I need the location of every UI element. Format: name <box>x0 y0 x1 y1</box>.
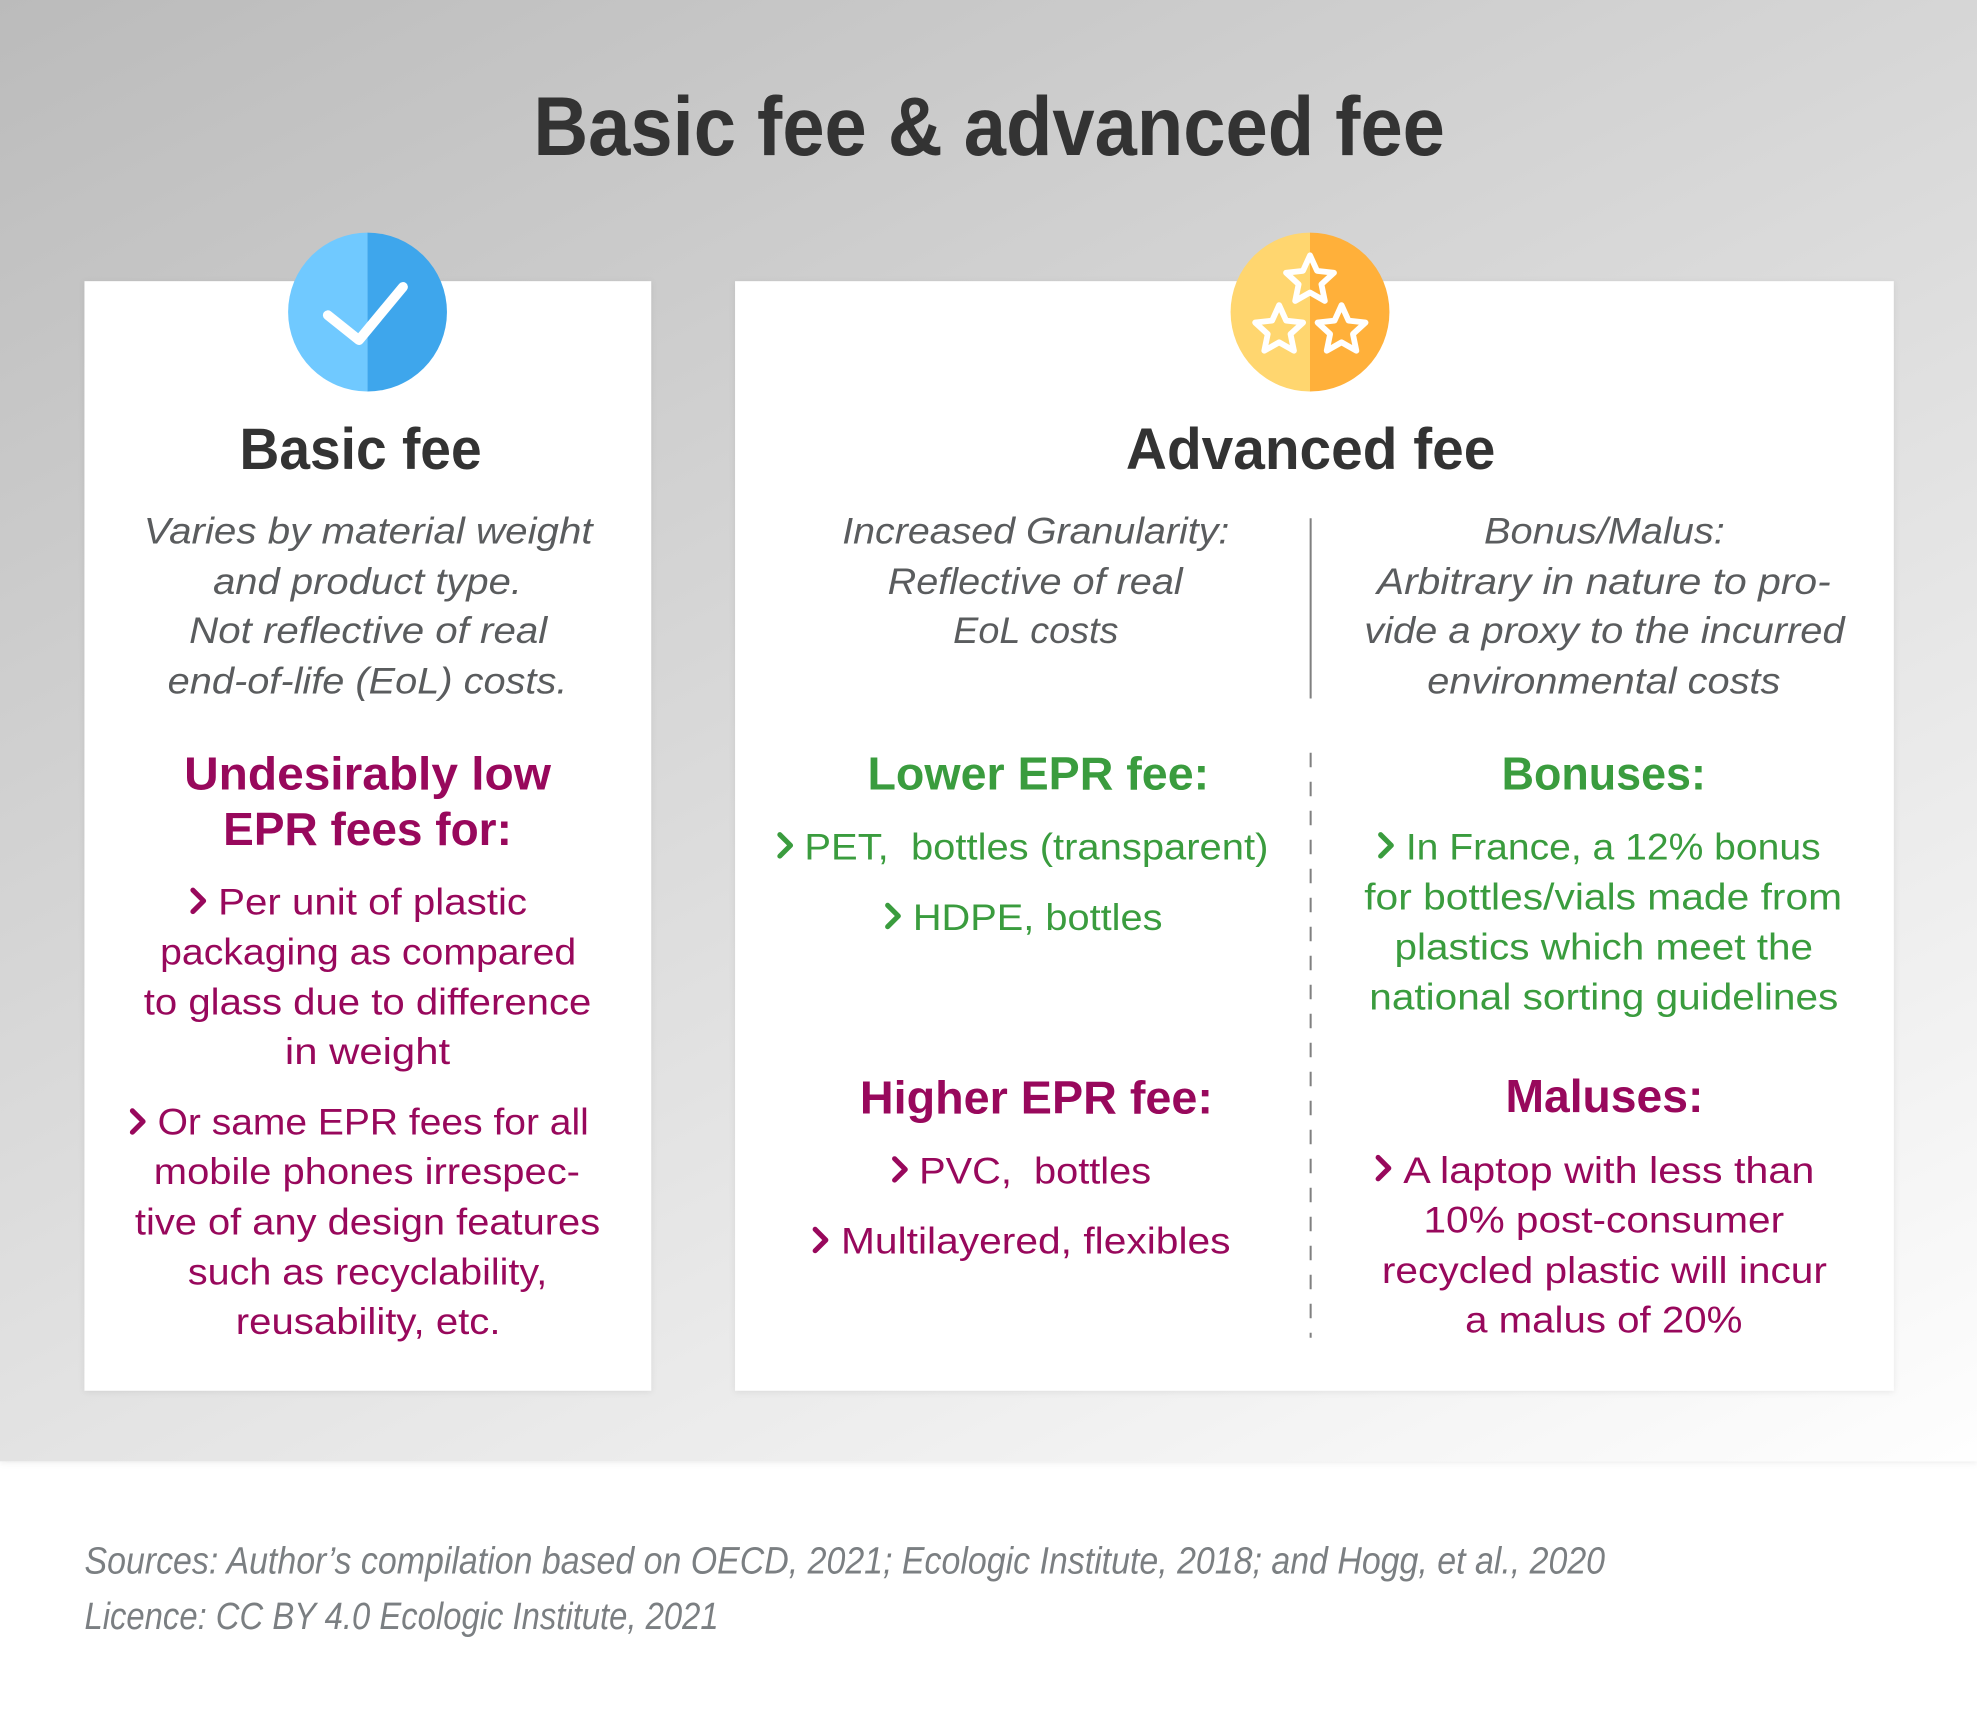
heading: basic fee: Basic fee <box>240 418 482 482</box>
subheading: undesirably low EPR fees <box>184 747 552 855</box>
text: increased granularity: Increased Granularity: <box>842 509 1229 551</box>
text: bonus/malus <box>1364 509 1846 701</box>
list item: France bonus: In France, a 12% bonus <box>1406 826 1821 868</box>
text: increased granularity <box>842 509 1229 651</box>
list item: laptop malus: 10% post-consumer <box>1423 1199 1784 1241</box>
subheading: undesirably low EPR fees: EPR fees for: <box>223 803 512 855</box>
list item: mobile phones: mobile phones irrespec- <box>154 1150 580 1192</box>
text: basic fee description <box>144 509 594 701</box>
text: basic fee description: Not reflective of real <box>189 609 549 651</box>
subheading: maluses: Maluses: <box>1505 1070 1703 1122</box>
footer: sources and licence: Licence: CC BY 4.0 Ecologic Institute, 2021 <box>84 1596 719 1638</box>
subheading: lower EPR fee: Lower EPR fee: <box>867 747 1209 799</box>
list item: mobile phones: such as recyclability, <box>188 1250 547 1292</box>
list item: France bonus <box>1364 826 1842 1018</box>
list item: PVC bottles: PVC, bottles <box>919 1149 1151 1191</box>
list item: multilayered flexibles: Multilayered, flexibles <box>841 1219 1231 1261</box>
list item: per unit of plastic: Per unit of plastic <box>218 881 527 923</box>
icon: check mark <box>288 233 447 391</box>
text: bonus/malus: vide a proxy to the incurred <box>1364 609 1846 651</box>
text: bonus/malus: environmental costs <box>1427 659 1780 701</box>
list item: HDPE bottles: HDPE, bottles <box>913 896 1162 938</box>
list item: France bonus: national sorting guidelines <box>1369 976 1838 1018</box>
list item: mobile phones: Or same EPR fees for all <box>158 1100 589 1142</box>
text: basic fee description: Varies by material weight <box>144 509 594 551</box>
text: increased granularity: EoL costs <box>953 609 1118 651</box>
footer: sources and licence <box>84 1541 1605 1638</box>
panel: basic fee <box>84 233 651 1391</box>
list item: per unit of plastic: to glass due to difference <box>144 981 591 1023</box>
panel: advanced fee <box>735 233 1894 1391</box>
list item: PET bottles: PET, bottles (transparent) <box>804 826 1268 868</box>
list item: per unit of plastic: in weight <box>285 1030 451 1072</box>
subheading: undesirably low EPR fees: Undesirably low <box>184 747 552 799</box>
list item: mobile phones: reusability, etc. <box>236 1300 501 1342</box>
subheading: bonuses: Bonuses: <box>1502 747 1706 799</box>
list item: mobile phones <box>132 1100 600 1342</box>
list item: laptop malus: a malus of 20% <box>1465 1298 1742 1340</box>
heading: advanced fee: Advanced fee <box>1126 418 1495 482</box>
icon: three stars <box>1231 233 1389 391</box>
list item: laptop malus <box>1378 1149 1827 1340</box>
text: bonus/malus: Arbitrary in nature to pro- <box>1375 560 1831 602</box>
text: bonus/malus: Bonus/Malus: <box>1484 509 1725 551</box>
list item: per unit of plastic <box>144 881 591 1072</box>
list item: France bonus: for bottles/vials made from <box>1364 875 1842 917</box>
list item: laptop malus: recycled plastic will incur <box>1382 1249 1827 1291</box>
list item: mobile phones: tive of any design features <box>135 1200 600 1242</box>
text: basic fee description: end-of-life (EoL) costs. <box>168 659 567 701</box>
title: Basic fee & advanced fee <box>533 80 1445 173</box>
text: increased granularity: Reflective of real <box>888 560 1185 602</box>
subheading: higher EPR fee: Higher EPR fee: <box>860 1071 1213 1123</box>
list item: per unit of plastic: packaging as compared <box>160 931 576 973</box>
list item: laptop malus: A laptop with less than <box>1403 1149 1814 1191</box>
text: basic fee description: and product type. <box>213 560 522 602</box>
list item: France bonus: plastics which meet the <box>1394 926 1813 968</box>
footer: sources and licence: Sources: Author’s compilation based on OECD, 2021; Ecologic Institute, 2018; and Hogg, et al., 2020 <box>84 1541 1605 1583</box>
